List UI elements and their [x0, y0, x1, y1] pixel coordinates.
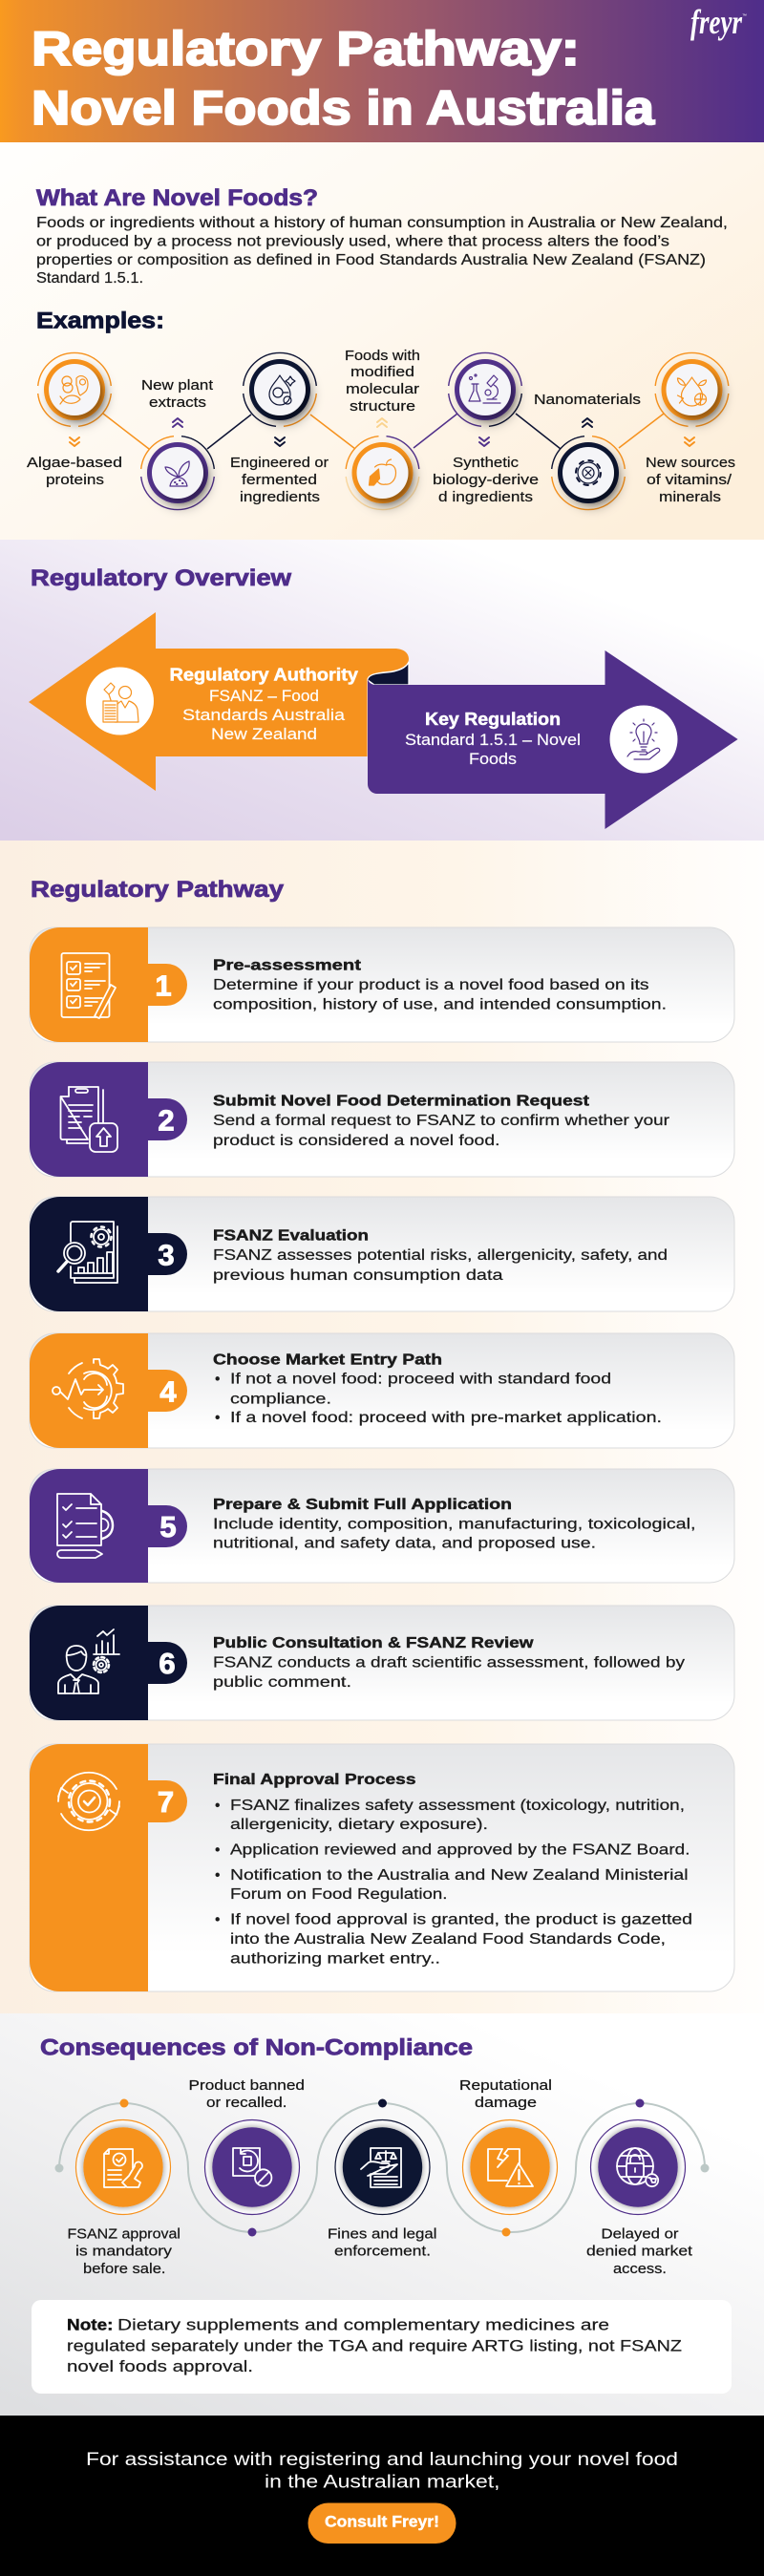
footer text: For assistance with registering and launching your novel food: [86, 2450, 678, 2470]
example 7: new sources of vitamins/minerals: [655, 352, 729, 426]
icon: locked globe with cart: [617, 2148, 658, 2186]
icon: evaluation report: [58, 1222, 117, 1283]
callout: note: regulated separately under the TGA and require ARTG listing, not FSANZ: [67, 2336, 682, 2355]
callout: note: Note:: [67, 2315, 113, 2334]
icon: stamped approval document: [104, 2149, 142, 2187]
step 4: 4: [159, 1375, 177, 1408]
example labels: biology-derive: [433, 472, 539, 488]
consequence labels: Product banned: [189, 2077, 305, 2094]
step 2: Send a formal request to FSANZ to confirm whether your: [213, 1113, 669, 1129]
icon: broken box with warning: [488, 2149, 533, 2186]
connector lines: [103, 414, 664, 449]
step 6: public comment.: [213, 1674, 351, 1691]
consequence labels: Delayed or: [602, 2225, 678, 2243]
step 7: [30, 1744, 734, 1991]
consequence labels: FSANZ approval: [67, 2225, 180, 2243]
example 2: new plant extracts: [141, 436, 214, 510]
icon: checklist: [61, 953, 116, 1018]
step 4: [30, 1333, 734, 1448]
step 7: Forum on Food Regulation.: [230, 1886, 447, 1903]
icon: application document: [57, 1494, 113, 1558]
example labels: Algae-based: [27, 455, 122, 471]
step 7: allergenicity, dietary exposure).: [230, 1817, 488, 1833]
step 2: product is considered a novel food.: [213, 1133, 500, 1149]
example 3: engineered or fermented ingredients: [244, 352, 316, 426]
arrow: regulatory authority: [29, 612, 409, 791]
example labels: molecular: [346, 381, 419, 397]
example 1: algae-based proteins: [38, 352, 111, 426]
step 4: •: [215, 1410, 220, 1426]
step 6: Public Consultation & FSANZ Review: [213, 1635, 534, 1651]
freyr logo: freyr: [690, 3, 743, 41]
step 5: Include identity, composition, manufacturing, toxicological,: [213, 1517, 695, 1532]
step 5: nutritional, and safety data, and proposed use.: [213, 1536, 596, 1551]
step 1: Pre-assessment: [213, 957, 362, 974]
step 1: [30, 927, 734, 1042]
step 1: 1: [155, 969, 172, 1003]
chevrons: [70, 418, 694, 446]
text: regulatory authority: [170, 665, 358, 743]
step 5: 5: [159, 1510, 177, 1543]
step 3: [30, 1197, 734, 1311]
example labels: Engineered or: [230, 455, 329, 471]
consequence labels: damage: [475, 2095, 537, 2111]
step 7: If novel food approval is granted, the product is gazetted: [230, 1912, 692, 1927]
icon: light bulb over hand: [609, 705, 678, 774]
title: Regulatory Pathway:: [32, 22, 580, 75]
consequence labels: denied market: [586, 2243, 693, 2260]
step 6: 6: [159, 1647, 176, 1680]
heading: consequences: Consequences of Non-Compliance: [40, 2034, 473, 2061]
icon: gear with nano pattern: [576, 460, 601, 485]
icon: recalled product with ban sign: [233, 2148, 271, 2186]
definition text: Foods or ingredients without a history of human consumption in Australia or New Zealand,: [36, 215, 728, 231]
example labels: structure: [350, 398, 415, 415]
example labels: modified: [350, 364, 414, 380]
text: key regulation: Key Regulation: [425, 710, 561, 729]
arrow: key regulation: [368, 650, 738, 829]
step 4: compliance.: [230, 1391, 331, 1408]
text: regulatory authority: New Zealand: [211, 725, 317, 743]
example labels: fermented: [242, 472, 317, 488]
panel: regulatory pathway: [30, 877, 734, 1991]
wavy timeline: [55, 2099, 709, 2237]
freyr logo: ™: [742, 13, 747, 19]
step 4: Choose Market Entry Path: [213, 1352, 442, 1368]
text: regulatory authority: Regulatory Authority: [170, 665, 358, 684]
step 4: •: [215, 1372, 220, 1387]
example labels: [27, 348, 735, 505]
consequence labels: Reputational: [459, 2077, 552, 2094]
consequence 3: fines and legal enforcement: [335, 2120, 430, 2214]
step 4: If a novel food: proceed with pre-market application.: [230, 1410, 662, 1426]
text: regulatory authority: FSANZ – Food: [209, 687, 319, 705]
definition text: [36, 215, 728, 287]
example labels: extracts: [149, 394, 206, 411]
text: key regulation: [405, 710, 581, 768]
icon: gear with approval check: [58, 1773, 119, 1830]
step 3: FSANZ assesses potential risks, allergenicity, safety, and: [213, 1247, 668, 1264]
footer text: [86, 2450, 678, 2493]
example labels: of vitamins/: [647, 472, 732, 488]
consequence labels: access.: [613, 2261, 667, 2277]
step 7: •: [215, 1867, 220, 1884]
panel: what are novel foods: [27, 185, 735, 510]
consequence labels: Fines and legal: [328, 2225, 437, 2243]
step 3: 3: [158, 1238, 175, 1272]
heading: what are novel foods: What Are Novel Foods?: [36, 185, 318, 211]
step 1: Determine if your product is a novel food based on its: [213, 977, 649, 993]
heading: examples: Examples:: [36, 308, 164, 334]
step 7: Final Approval Process: [213, 1772, 416, 1788]
icon: scales, hand and document: [361, 2148, 401, 2187]
icon: microscope and flask: [469, 374, 500, 403]
consequence 4: reputational damage: [462, 2120, 558, 2214]
example 6: nanomaterials: [552, 436, 625, 510]
icon: apple: [369, 459, 395, 485]
icon: authority person with document: [86, 667, 154, 735]
consequence labels: enforcement.: [334, 2243, 431, 2260]
step 4: If not a novel food: proceed with standard food: [230, 1372, 611, 1387]
example labels: New plant: [141, 377, 214, 394]
icon: steak, eggs and fish: [60, 376, 88, 404]
icon: consultant with chart and gear: [58, 1629, 119, 1693]
step 2: 2: [158, 1104, 175, 1137]
step 7: FSANZ finalizes safety assessment (toxicology, nutrition,: [230, 1798, 685, 1814]
footer call to action: [86, 2450, 678, 2544]
callout: note: [32, 2300, 732, 2394]
step 3: FSANZ Evaluation: [213, 1228, 369, 1244]
icon: upload document: [60, 1087, 117, 1152]
example labels: Foods with: [345, 348, 420, 364]
definition text: properties or composition as defined in Food Standards Australia New Zealand (FSANZ): [36, 252, 706, 268]
example 5: synthetic biology-derived ingredients: [449, 352, 521, 426]
example labels: proteins: [46, 472, 104, 488]
callout: note: novel foods approval.: [67, 2357, 253, 2375]
step 5: Prepare & Submit Full Application: [213, 1497, 512, 1513]
callout: note: Dietary supplements and complementary medicines are: [117, 2315, 609, 2334]
example 4: foods with modified molecular structure: [346, 436, 419, 510]
example labels: minerals: [659, 489, 721, 505]
consequence labels: or recalled.: [206, 2095, 286, 2111]
footer text: in the Australian market,: [265, 2472, 500, 2493]
step 2: [30, 1062, 734, 1177]
consequence labels: is mandatory: [75, 2243, 173, 2260]
consequence labels: before sale.: [83, 2261, 166, 2277]
text: regulatory authority: Standards Australia: [182, 706, 346, 724]
step 7: into the Australia New Zealand Food Standards Code,: [230, 1931, 666, 1948]
step 7: •: [215, 1842, 220, 1859]
consequence 1: approval mandatory: [76, 2120, 170, 2214]
example labels: New sources: [646, 455, 735, 471]
step 3: previous human consumption data: [213, 1267, 503, 1284]
icon: drop with leaves and citrus: [678, 377, 707, 406]
heading: regulatory overview: Regulatory Overview: [31, 565, 291, 591]
step 7: •: [215, 1798, 220, 1814]
title: [32, 22, 655, 135]
consequence 2: product banned: [204, 2120, 300, 2214]
header banner: [0, 0, 764, 142]
icon: droplet: [269, 375, 295, 405]
step 5: [30, 1469, 734, 1583]
step 6: [30, 1606, 734, 1720]
step 2: Submit Novel Food Determination Request: [213, 1093, 590, 1110]
text: key regulation: Standard 1.5.1 – Novel: [405, 731, 581, 749]
consequence 5: delayed or denied market access: [590, 2120, 686, 2214]
example labels: Nanomaterials: [534, 392, 641, 408]
icon: sprout: [165, 461, 189, 486]
example labels: Synthetic: [453, 455, 520, 471]
heading: regulatory pathway: Regulatory Pathway: [31, 877, 285, 903]
step 1: composition, history of use, and intended consumption.: [213, 997, 667, 1012]
button: consult freyr: [308, 2502, 456, 2544]
panel: consequences of non-compliance: [32, 2034, 732, 2394]
definition text: or produced by a process not previously used, where that process alters the food’s: [36, 233, 669, 250]
panel: regulatory overview: [29, 565, 738, 829]
step 7: Notification to the Australia and New Zealand Ministerial: [230, 1867, 688, 1884]
ribbon fold: [368, 662, 409, 685]
step 7: authorizing market entry..: [230, 1950, 440, 1968]
button: consult freyr: Consult Freyr!: [325, 2512, 439, 2531]
definition text: Standard 1.5.1.: [36, 270, 143, 287]
step 7: •: [215, 1912, 220, 1927]
consequence labels: [67, 2077, 693, 2277]
title: Novel Foods in Australia: [32, 81, 655, 135]
example labels: ingredients: [240, 489, 320, 505]
step 6: FSANZ conducts a draft scientific assessment, followed by: [213, 1654, 685, 1671]
text: key regulation: Foods: [469, 750, 517, 768]
example labels: d ingredients: [438, 489, 533, 505]
step 7: Application reviewed and approved by the FSANZ Board.: [230, 1842, 690, 1859]
icon: gear with market entry arrow: [53, 1359, 123, 1418]
step 7: 7: [158, 1785, 174, 1819]
